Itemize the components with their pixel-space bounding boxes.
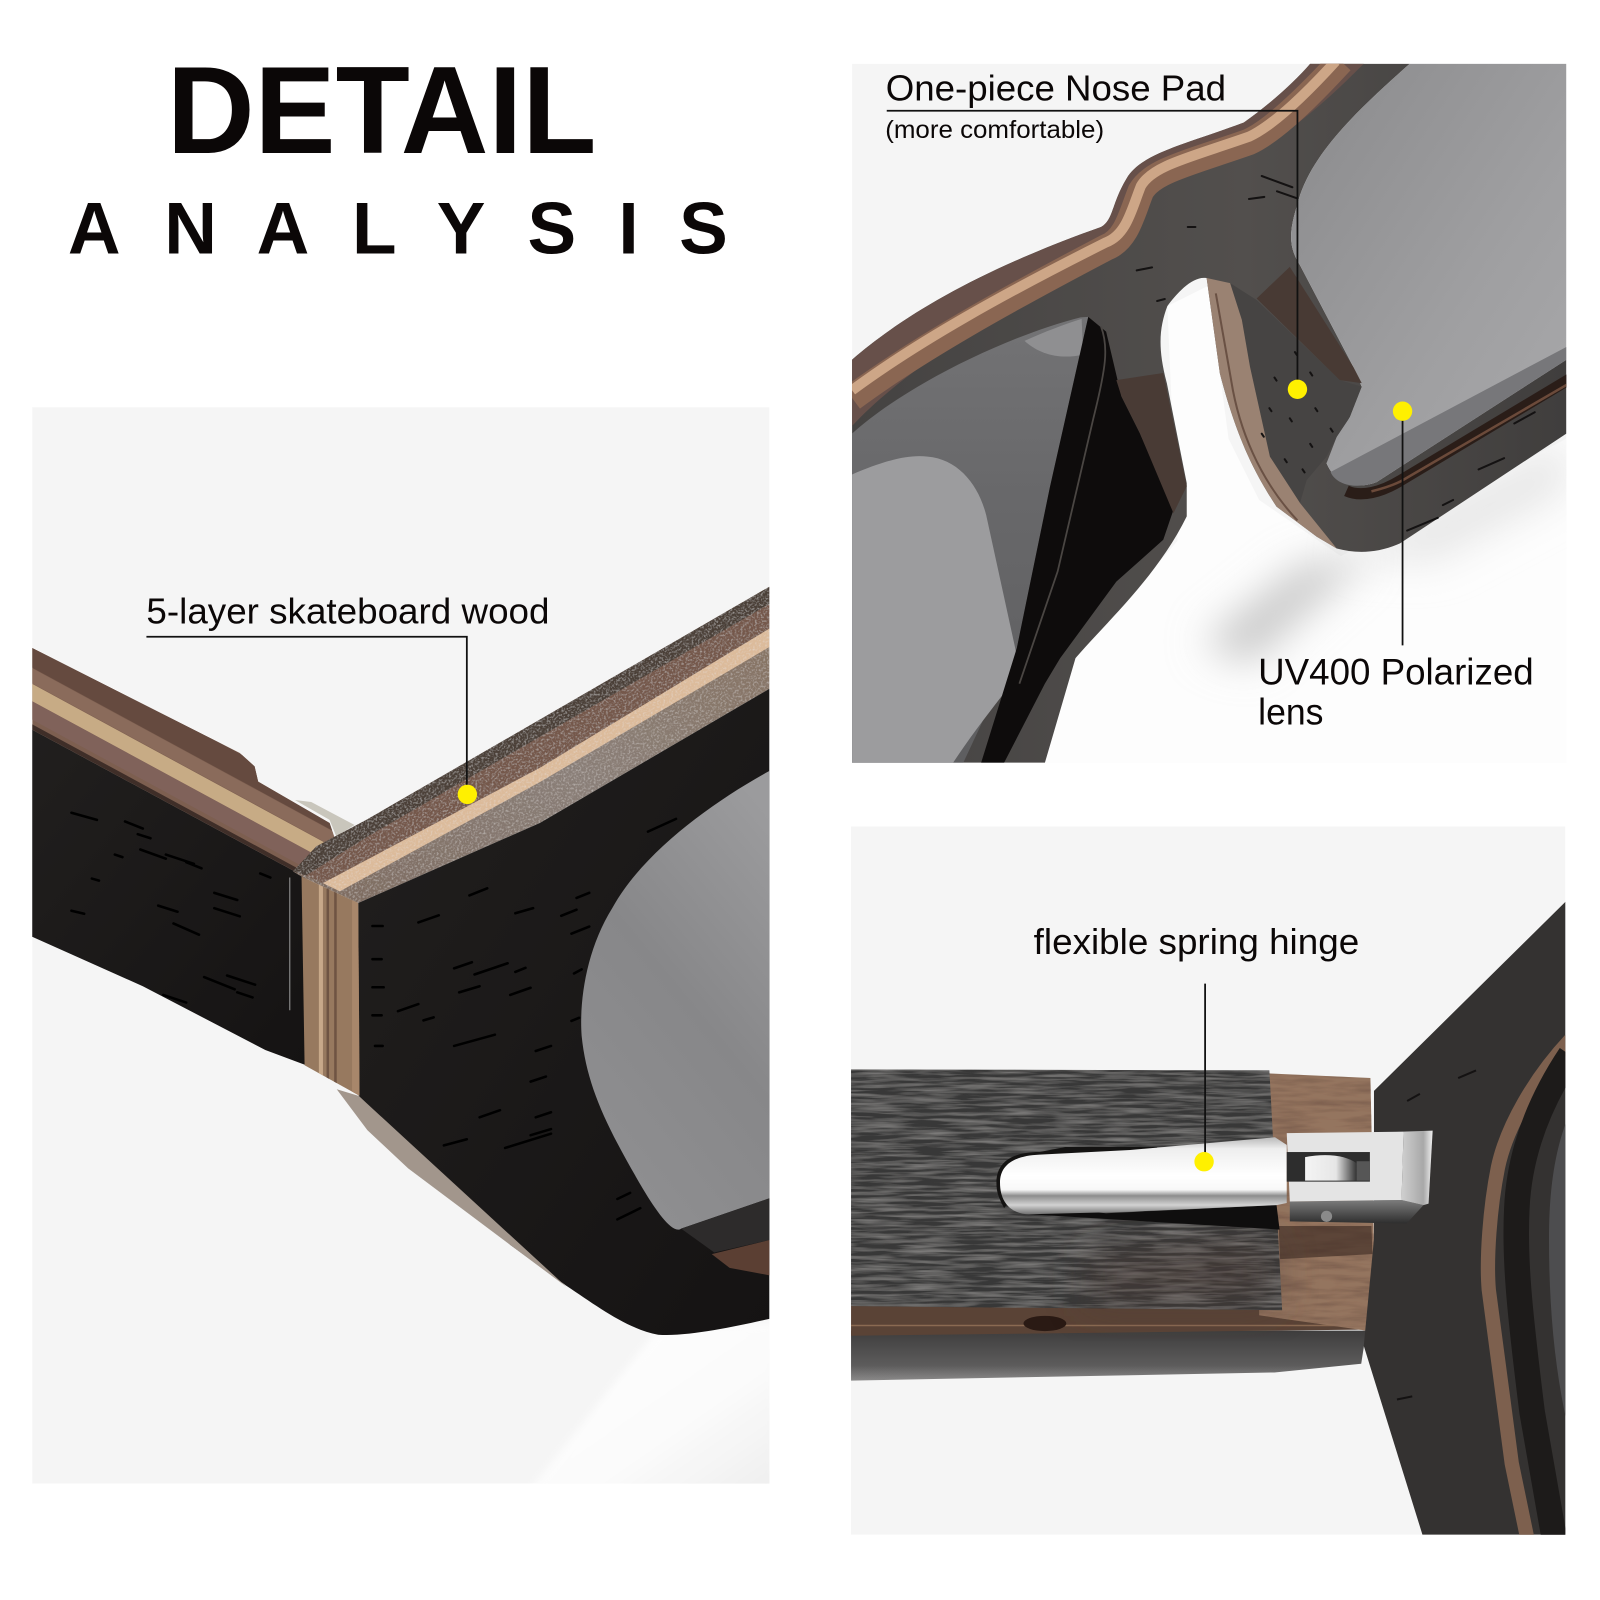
callout label: UV400 Polarized lens: UV400 Polarized [1258, 652, 1534, 693]
frame top wood layers [293, 587, 769, 903]
wood end block [1259, 1073, 1374, 1331]
marker dot: lens [1393, 402, 1412, 421]
callout line: wood [146, 637, 467, 794]
hinge roller [1305, 1155, 1357, 1181]
bright area below bridge [1035, 286, 1566, 765]
arm shadow [1000, 1203, 1280, 1230]
callout label: UV400 Polarized lens: lens [1258, 691, 1323, 732]
temple shadow [851, 1331, 1366, 1381]
marker dot: hinge [1194, 1152, 1214, 1171]
temple wood layers [32, 648, 334, 870]
frame inner dark [1516, 1055, 1570, 1537]
soft right shade [1378, 448, 1566, 566]
wood pores [71, 813, 676, 1219]
frame inner wood line [1488, 1040, 1570, 1537]
frame pores [1137, 176, 1535, 531]
lens sliver [1549, 1111, 1570, 1438]
hinge window [1287, 1152, 1370, 1182]
panel: 5-layer wood corner [20, 407, 776, 1495]
right frame [1364, 897, 1570, 1535]
joint line [289, 878, 290, 1010]
title: DETAIL: DETAIL [167, 42, 596, 180]
left lens reflection [1024, 319, 1083, 357]
temple black side [32, 730, 306, 1065]
frame pores [1397, 1070, 1476, 1399]
callout label: One-piece Nose Pad: One-piece Nose Pad [886, 69, 1226, 109]
left lens pale patch [852, 456, 1017, 763]
right lens [1291, 64, 1566, 485]
marker dot: wood [458, 785, 477, 804]
hinge block underside [1290, 1200, 1423, 1223]
callout label: flexible spring hinge: flexible spring hinge [1034, 922, 1359, 962]
lens bottom band [1331, 347, 1566, 486]
marker dot: nose pad [1288, 380, 1307, 399]
lens lower edge [681, 1198, 770, 1253]
cast shadow [1203, 554, 1371, 663]
light patch under frame [526, 1321, 776, 1495]
callout label: 5-layer skateboard wood: 5-layer skateboard wood [146, 591, 549, 631]
inner wood line [1346, 379, 1570, 494]
metal arm [1000, 1137, 1287, 1214]
frame front black [358, 689, 769, 1335]
left lens dark zone [852, 317, 1088, 763]
subtitle: ANALYSIS: ANALYSIS [68, 189, 728, 270]
wood rim left [1116, 373, 1187, 513]
callout line: lens [1402, 420, 1404, 646]
brown tone lower temple [1086, 1239, 1277, 1303]
nose pad brown edge [1257, 267, 1362, 383]
hinge sliver [295, 800, 355, 836]
nose pad face [1230, 283, 1362, 503]
nose pad wood layers [1207, 278, 1337, 548]
callout line: nose pad [887, 111, 1297, 389]
end grain layers [302, 876, 360, 1096]
temple face [851, 1069, 1282, 1310]
slot shadow [996, 1147, 1157, 1208]
hinge back plate [1357, 1161, 1370, 1181]
frame body [852, 64, 1566, 763]
wood layers along brow [852, 61, 1364, 426]
black bevel [981, 317, 1173, 763]
temple wood strip [851, 1303, 1361, 1336]
callout sublabel: more comfortable: (more comfortable) [885, 116, 1104, 144]
callout label: UV400 Polarized lens [1258, 652, 1534, 732]
underside wood [337, 1089, 566, 1287]
hinge screw [1321, 1211, 1332, 1222]
screw hole [1023, 1316, 1066, 1331]
lens [581, 770, 770, 1230]
inner wood strip [712, 1240, 770, 1276]
wood shaded below hinge [1279, 1226, 1372, 1259]
callout line: hinge [1203, 984, 1207, 1157]
hinge block front [1287, 1132, 1404, 1202]
panel: nose pad and lens [852, 61, 1570, 765]
hinge jaw [1402, 1131, 1433, 1205]
panel: spring hinge [851, 827, 1570, 1537]
